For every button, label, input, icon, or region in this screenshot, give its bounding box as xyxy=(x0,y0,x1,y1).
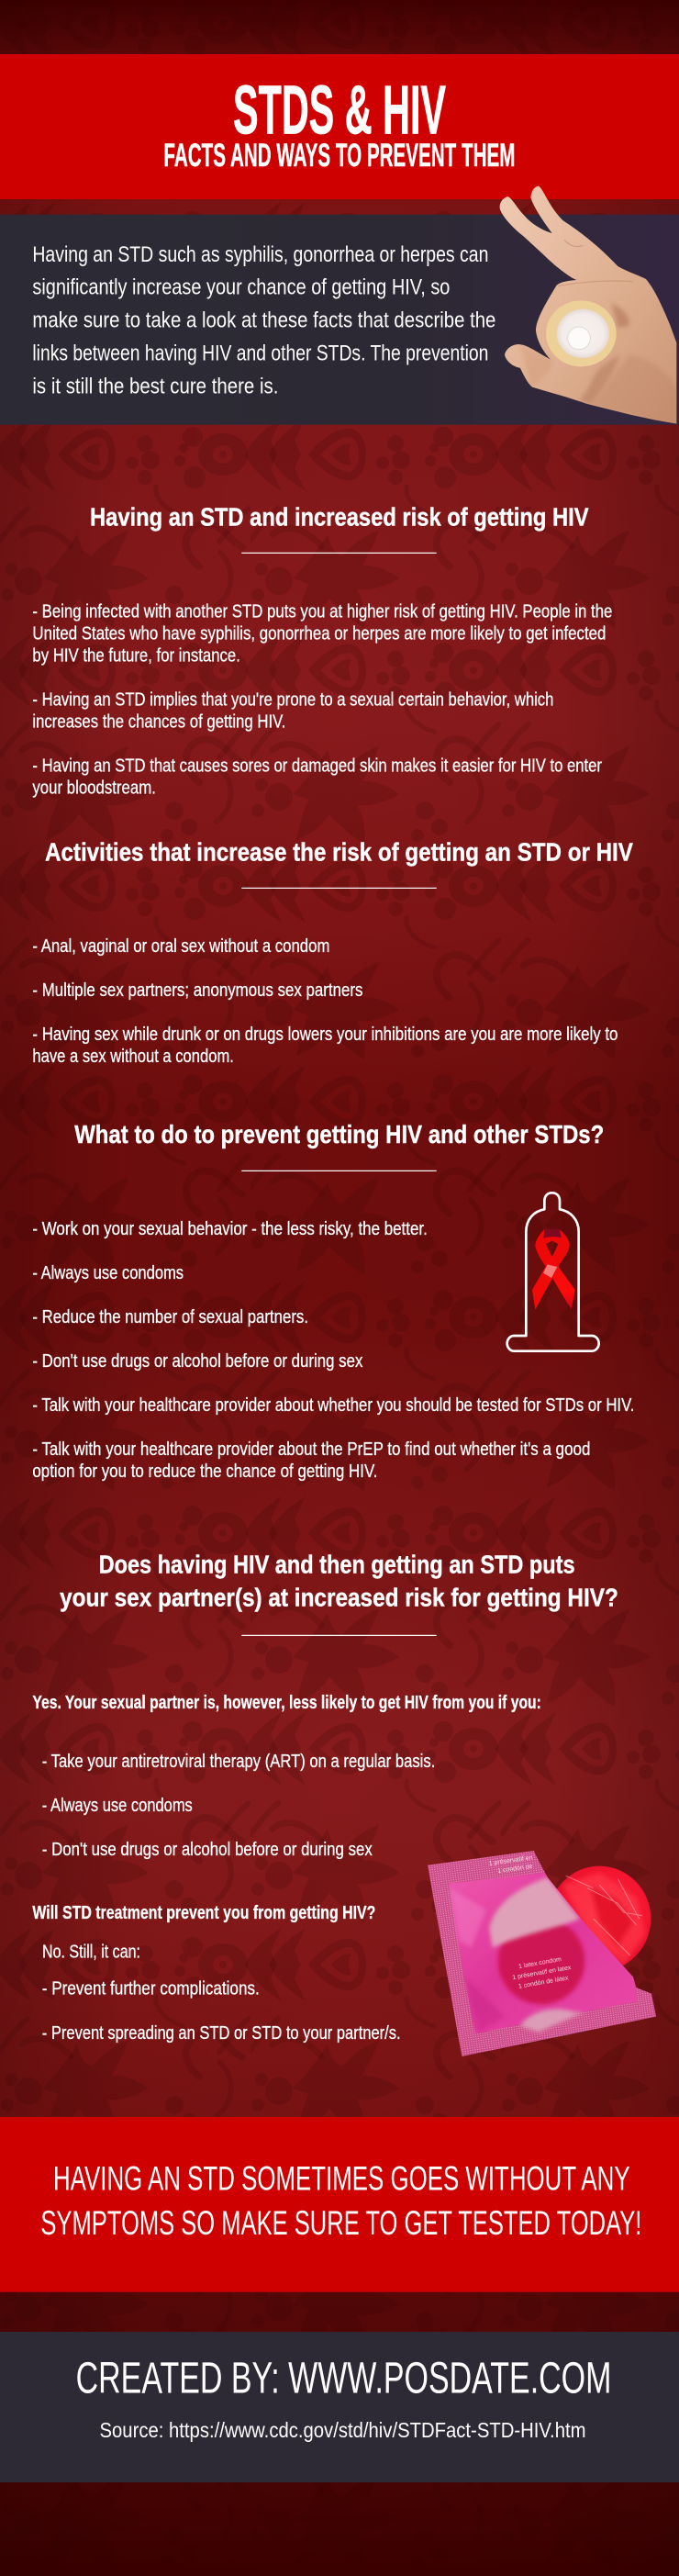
text: activities list xyxy=(32,935,618,1067)
section 4 xyxy=(32,1550,618,2044)
text: partner answer: - Don't use drugs or alcohol before or during sex xyxy=(42,1839,373,1860)
intro text: make sure to take a look at these facts that describe the xyxy=(32,308,495,333)
text: treatment answer: Will STD treatment prevent you from getting HIV? xyxy=(32,1902,375,1923)
intro text: significantly increase your chance of getting HIV, so xyxy=(32,275,450,300)
text: risk facts: by HIV the future, for instance. xyxy=(32,644,240,666)
text: prevention list xyxy=(32,1218,634,1482)
panel: call to action xyxy=(0,2117,679,2292)
text: source: Source: https://www.cdc.gov/std/hiv/STDFact-STD-HIV.htm xyxy=(99,2418,585,2442)
heading: partner risk xyxy=(60,1550,618,1611)
icon: opened condom packet: 1 préservatif en xyxy=(488,1854,533,1867)
heading: increased risk: Having an STD and increased risk of getting HIV xyxy=(90,502,589,531)
text: risk facts: your bloodstream. xyxy=(32,777,156,798)
text: packet print: 1 latex condom xyxy=(518,1956,562,1970)
icon: red ribbon xyxy=(532,1229,575,1310)
text: risk facts xyxy=(32,600,612,798)
icon: condom outline with red ribbon xyxy=(507,1193,599,1351)
section 2 xyxy=(32,837,633,1067)
text: risk facts: increases the chances of getting HIV. xyxy=(32,711,285,732)
intro text xyxy=(32,242,495,398)
heading: prevention: What to do to prevent getting HIV and other STDs? xyxy=(74,1120,604,1148)
text: treatment answer: - Prevent further complications. xyxy=(42,1978,260,1999)
text: prevention list: - Don't use drugs or alcohol before or during sex xyxy=(32,1350,363,1372)
text: packet print xyxy=(510,1954,573,1991)
text: activities list: have a sex without a condom. xyxy=(32,1046,234,1067)
text: partner answer: - Take your antiretroviral therapy (ART) on a regular basis. xyxy=(42,1751,435,1772)
text: treatment answer: - Prevent spreading an STD or STD to your partner/s. xyxy=(42,2022,401,2044)
text: treatment answer: No. Still, it can: xyxy=(42,1942,140,1963)
text: risk facts: - Having an STD implies that you're prone to a sexual certain behavior, which xyxy=(32,689,553,710)
section 3 xyxy=(32,1120,634,1482)
text: prevention list: option for you to reduce the chance of getting HIV. xyxy=(32,1461,377,1482)
text: call to action xyxy=(40,2160,641,2242)
text: packet print: 1 condón de látex xyxy=(518,1975,570,1990)
panel: credits xyxy=(0,2332,679,2482)
text: activities list: - Multiple sex partners; anonymous sex partners xyxy=(32,980,362,1001)
text: treatment answer xyxy=(32,1902,401,2044)
panel: introduction xyxy=(0,215,679,425)
icon: hand holding condom xyxy=(500,186,676,424)
heading: partner risk: Does having HIV and then getting an STD puts xyxy=(99,1550,575,1578)
text: partner answer: Yes. Your sexual partner is, however, less likely to get HIV from you if you: xyxy=(32,1692,541,1713)
section 1 xyxy=(32,502,612,798)
text: packet print: 1 préservatif en latex xyxy=(512,1965,572,1981)
intro text: Having an STD such as syphilis, gonorrhea or herpes can xyxy=(32,242,488,267)
intro text: is it still the best cure there is. xyxy=(32,374,278,398)
intro text: links between having HIV and other STDs. The prevention xyxy=(32,342,488,366)
text: partner answer xyxy=(32,1692,541,1860)
icon: opened condom packet: 1 condón de xyxy=(497,1864,533,1875)
text: prevention list: - Always use condoms xyxy=(32,1262,184,1283)
text: prevention list: - Reduce the number of sexual partners. xyxy=(32,1306,308,1327)
title: STDS & HIV xyxy=(233,72,446,149)
text: activities list: - Anal, vaginal or oral sex without a condom xyxy=(32,935,329,957)
panel: title banner xyxy=(0,54,679,199)
text: prevention list: - Work on your sexual behavior - the less risky, the better. xyxy=(32,1218,428,1239)
icon: opened condom packet xyxy=(428,1851,656,2056)
text: partner answer: - Always use condoms xyxy=(42,1795,193,1816)
